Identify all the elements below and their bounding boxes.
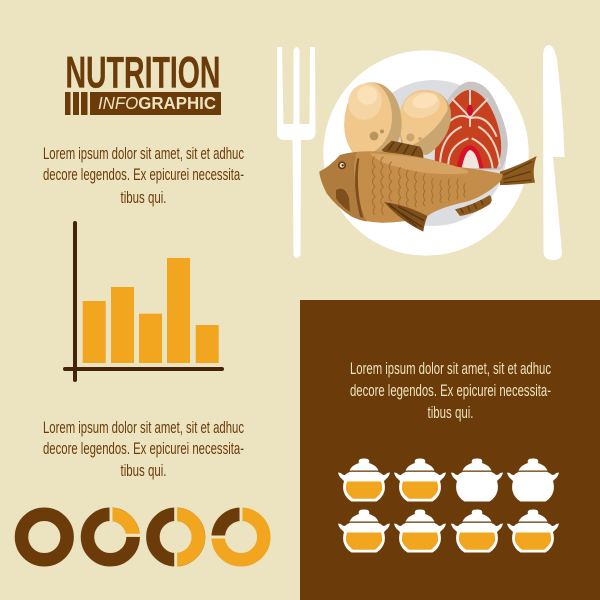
pot 7 (451, 510, 503, 552)
eye (338, 161, 346, 169)
pot 8 (507, 510, 559, 552)
pot 4 (507, 458, 559, 502)
pot pictogram (338, 458, 559, 552)
heading: NUTRITION: NUTRITION (66, 48, 220, 98)
text block: middle left (43, 418, 244, 480)
fish (319, 141, 537, 232)
icon: knife (543, 45, 564, 260)
text block: brown panel: tibus qui. (428, 403, 474, 422)
tail (500, 156, 537, 185)
donut: three quarters (209, 505, 264, 560)
text block: middle left: Lorem ipsum dolor sit amet, sit et adhuc (43, 418, 244, 437)
illustration: plate with food (319, 50, 537, 256)
pot 2 (394, 458, 446, 502)
icon: fork (277, 47, 316, 258)
pot 6 (394, 510, 446, 552)
pot 1 (338, 458, 390, 502)
plate (323, 50, 529, 256)
egg: left (343, 79, 402, 153)
stripes (65, 92, 88, 115)
body (319, 151, 502, 223)
inner plate (360, 80, 506, 226)
donut charts (22, 505, 264, 569)
bars (83, 258, 219, 363)
scales (372, 157, 465, 215)
title: Nutrition Infographic (65, 48, 221, 115)
axes (65, 223, 222, 380)
donut: quarter (88, 505, 142, 560)
bar chart (65, 223, 222, 380)
panel: brown block (300, 300, 600, 600)
pot 5 (338, 510, 390, 552)
text block: middle left: tibus qui. (120, 461, 166, 480)
back highlight (370, 153, 469, 174)
text block: top: Lorem ipsum dolor sit amet, sit et adhuc (43, 144, 244, 163)
donut: half (153, 505, 205, 569)
text block: top: decore legendos. Ex epicurei necessita- (43, 165, 244, 184)
salmon steak (435, 82, 508, 170)
text block: brown panel (350, 359, 551, 422)
subheading: INFOGRAPHIC: INFOGRAPHIC (98, 93, 216, 113)
dorsal fin (382, 141, 423, 161)
rear fin (455, 195, 492, 216)
text block: middle left: decore legendos. Ex epicurei necessita- (43, 439, 244, 458)
text block: top: tibus qui. (120, 188, 166, 207)
donut: full (22, 514, 67, 560)
pot 3 (451, 458, 503, 502)
banner (90, 92, 221, 115)
head (319, 152, 367, 222)
egg: right (399, 89, 451, 155)
text block: top (43, 144, 244, 207)
belly fin (384, 202, 427, 232)
